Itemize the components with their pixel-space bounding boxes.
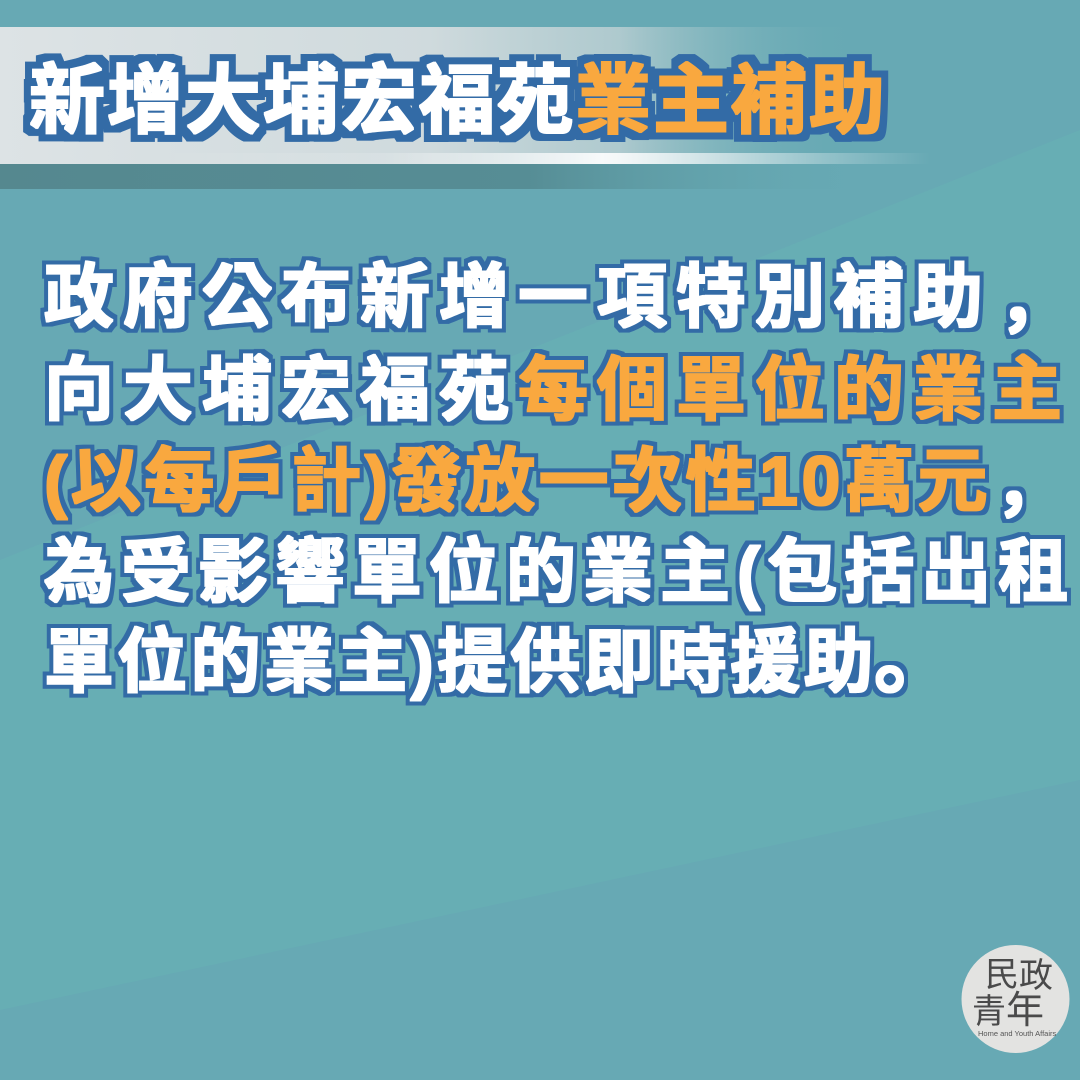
title: 新增大埔宏福苑業主補助: [29, 59, 887, 144]
logo badge: 政: [1019, 957, 1053, 995]
logo badge: 民: [985, 956, 1019, 994]
logo badge: 年: [1006, 990, 1044, 1032]
body text: (以每戶計)發放一次性10萬元: [44, 442, 991, 520]
logo badge: [962, 945, 1070, 1053]
body text: ，: [998, 261, 1077, 339]
body text: 單位的業主)提供即時援助。: [44, 613, 959, 704]
title banner: [0, 27, 930, 189]
body text: [44, 258, 1077, 704]
logo badge: Home and Youth Affairs: [978, 1029, 1057, 1038]
logo badge: 青: [972, 993, 1006, 1031]
body text: 為受影響單位的業主(包括出租: [44, 533, 1075, 611]
body text: 政府公布新增一項特別補助: [44, 258, 992, 336]
body text: 向大埔宏福苑每個單位的業主: [44, 351, 1071, 429]
body text: ，: [994, 445, 1067, 523]
